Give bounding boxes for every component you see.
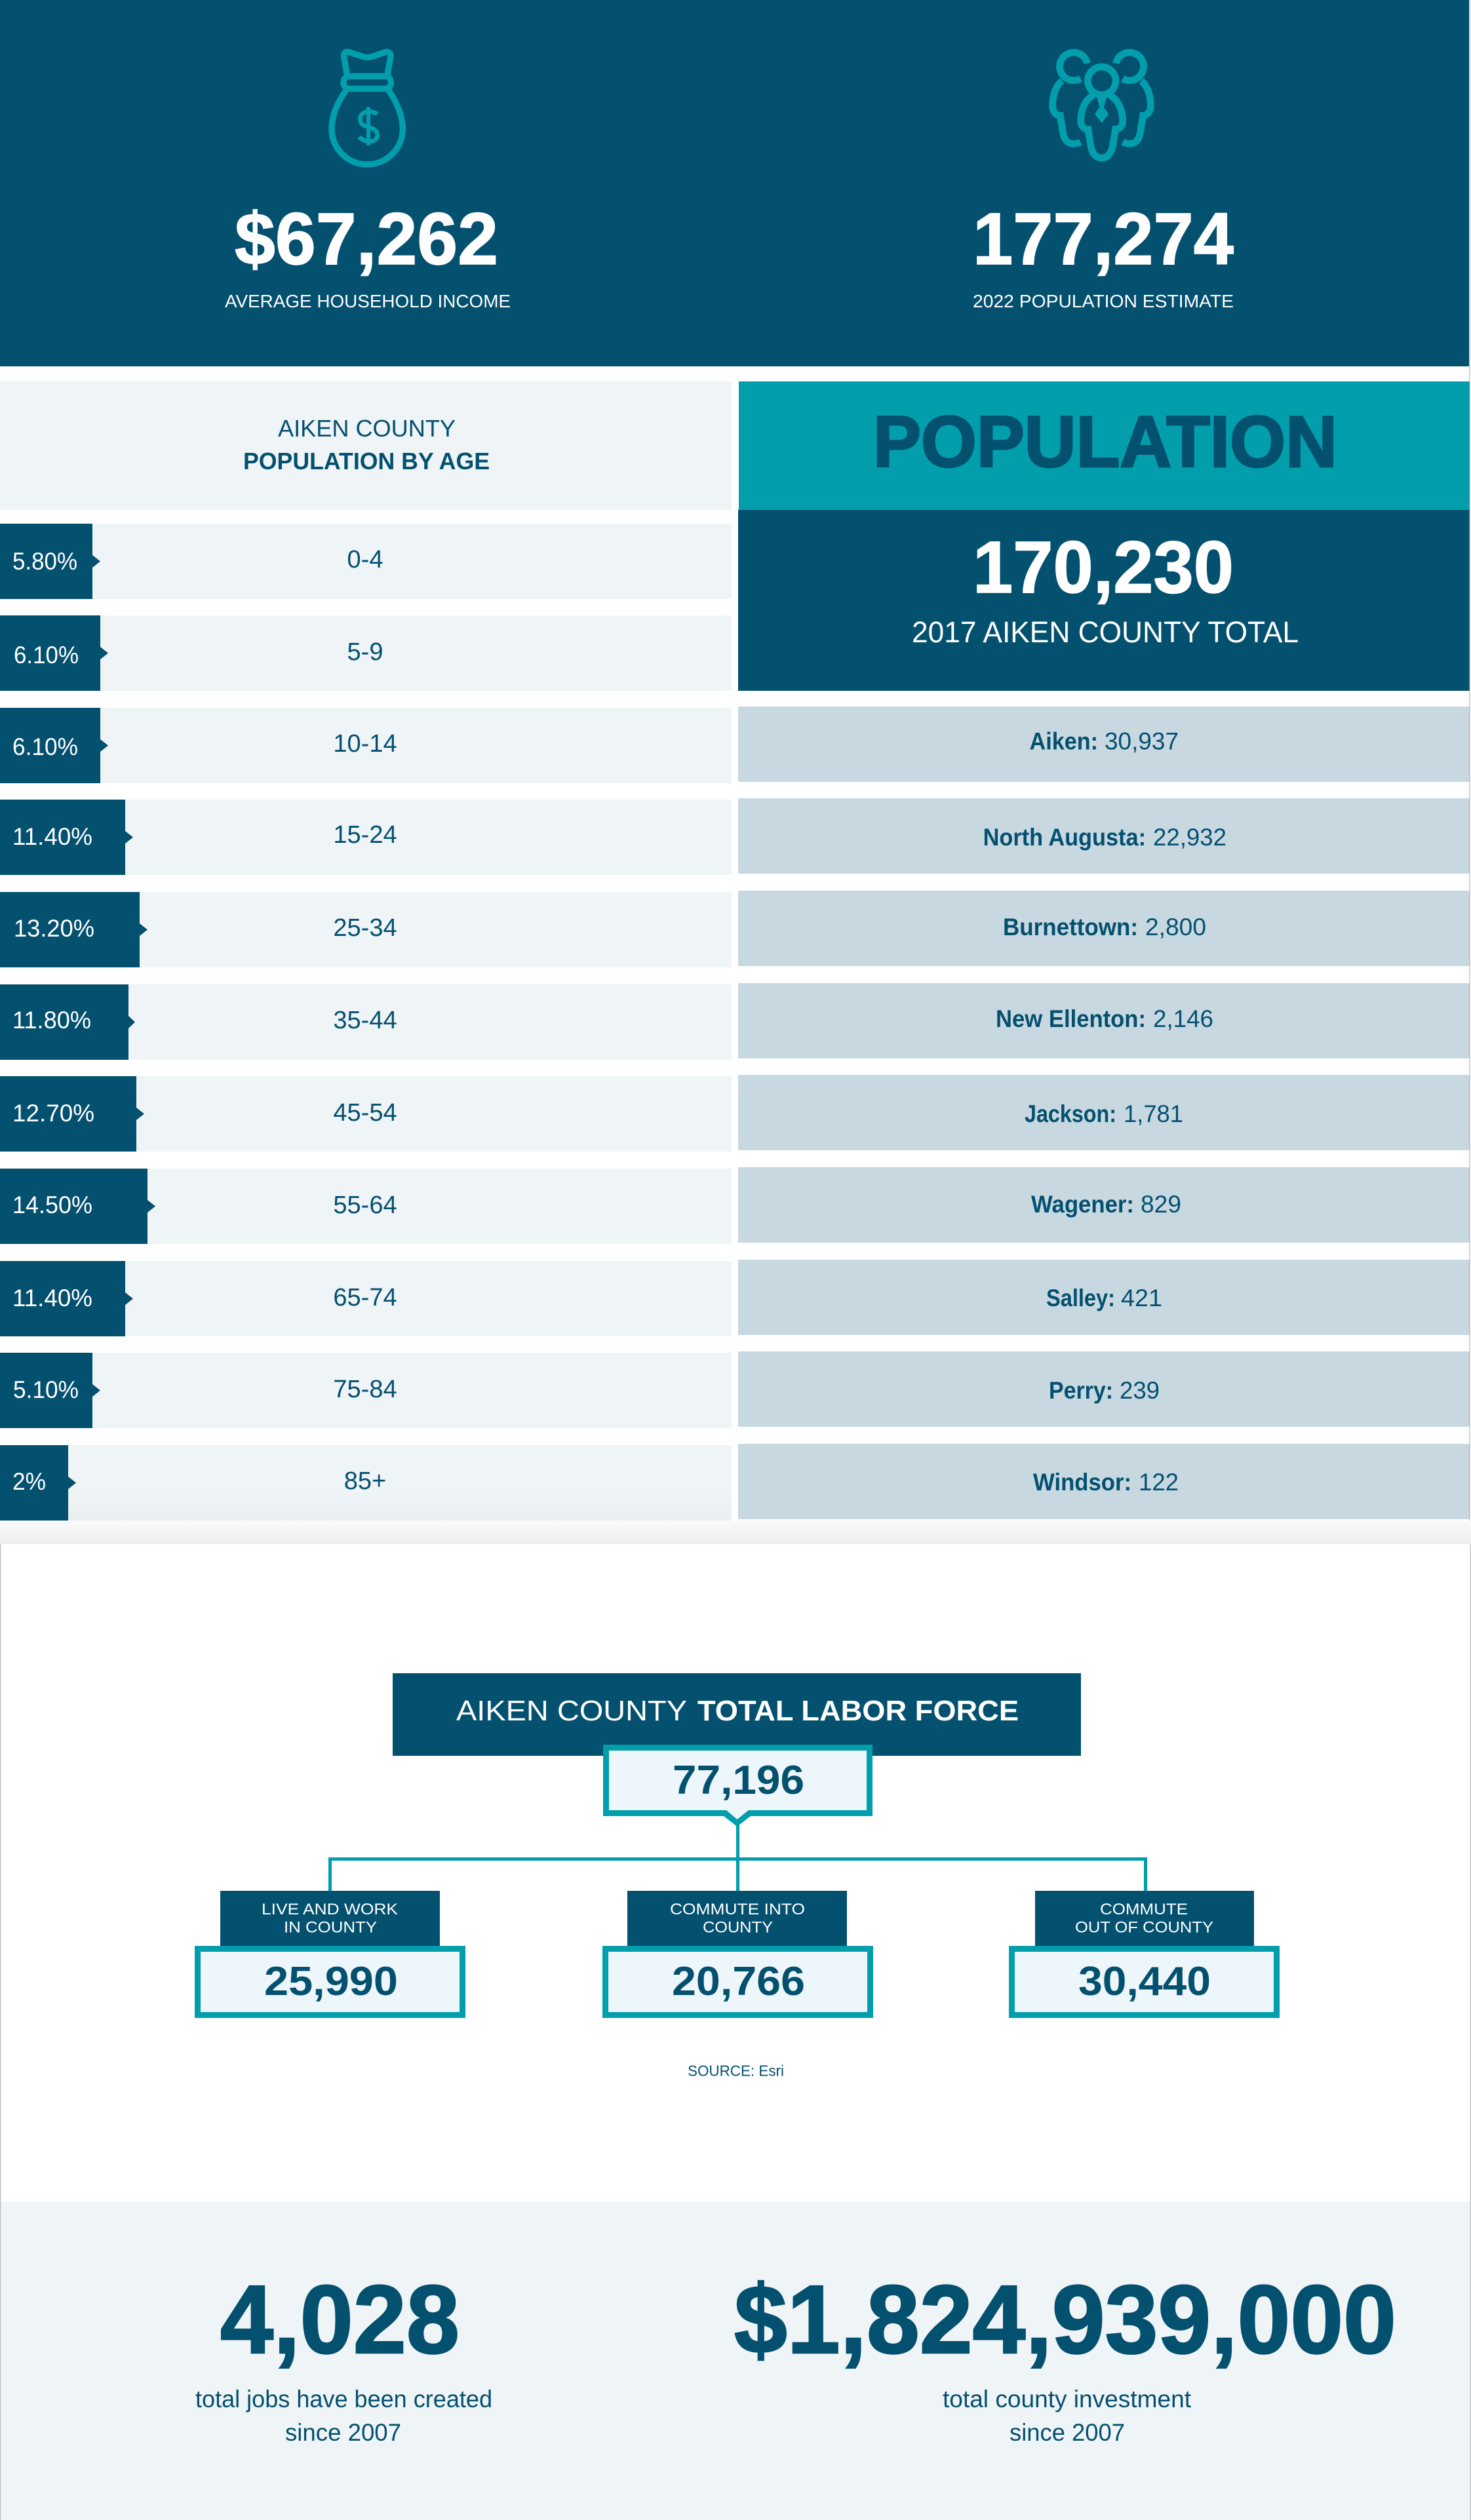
age row 15-24: 11.40% [12,823,92,850]
age row 5-9 [0,615,732,691]
county total label: 2017 AIKEN COUNTY TOTAL [912,615,1299,649]
county total value: 170,230 [973,526,1234,608]
city row Perry: 239 [1120,1377,1160,1404]
city row Salley: 421 [1121,1285,1162,1311]
city row Burnettown [738,891,1470,966]
age row 55-64 [0,1169,732,1244]
branch: commute out of county: COMMUTE [1100,1901,1188,1918]
city row Jackson: Jackson: [1025,1100,1116,1127]
age row 10-14: 6.10% [12,733,78,760]
city row Jackson [738,1075,1470,1150]
branch: live and work in county: 25,990 [264,1959,398,2004]
icon: money bag [332,52,402,165]
heading line: county: AIKEN COUNTY [278,415,456,442]
panel: population title [739,381,1470,510]
jobs stat: total jobs have been created [195,2386,492,2413]
heading line: population by age: POPULATION BY AGE [243,448,490,475]
age row 25-34: 25-34 [333,914,397,942]
city row Wagener: Wagener: [1031,1191,1134,1218]
city row Burnettown: 2,800 [1145,914,1206,940]
panel: total labor force diagram [198,1673,1277,2079]
city row Wagener [738,1167,1470,1243]
panel: population by city list [738,707,1470,1519]
age row 25-34 [0,892,732,967]
total value callout box: 77,196 [673,1758,804,1803]
city row New Ellenton [738,983,1470,1058]
total value callout box [603,1745,873,1827]
age row 85+ [0,1445,732,1521]
branch: commute out of county [1012,1891,1277,2015]
age row 0-4: 5.80% [12,548,77,575]
age row 5-9: 6.10% [14,642,79,669]
age row 45-54: 45-54 [333,1099,397,1127]
age row 85+: 85+ [344,1467,386,1495]
city row Jackson: 1,781 [1124,1100,1183,1127]
labor force heading [393,1673,1081,1756]
jobs stat: 4,028 [220,2266,460,2374]
branch: commute out of county: OUT OF COUNTY [1075,1919,1213,1936]
age row 35-44: 11.80% [12,1007,91,1034]
city row Salley: Salley: [1046,1285,1115,1311]
age row 5-9: 5-9 [347,638,383,666]
city row Aiken: 30,937 [1105,727,1179,755]
age row 75-84: 5.10% [13,1376,79,1403]
city row New Ellenton: 2,146 [1153,1005,1213,1032]
age row 55-64: 14.50% [12,1192,92,1218]
panel: population by age heading [0,381,732,510]
city row Perry [738,1351,1470,1427]
population estimate label: 2022 POPULATION ESTIMATE [973,291,1234,311]
city row Windsor: Windsor: [1033,1469,1131,1496]
source note: SOURCE: Esri [688,2062,784,2079]
income value: $67,262 [235,198,498,280]
jobs stat [195,2266,492,2446]
age row 45-54: 12.70% [12,1100,94,1127]
connector lines [328,1822,1147,1891]
age row 85+: 2% [12,1468,46,1495]
city row Salley [738,1260,1470,1335]
city row North Augusta [738,798,1470,874]
investment stat [734,2266,1396,2446]
age row 65-74: 11.40% [12,1285,92,1311]
panel: 2017 county total [738,510,1470,691]
labor force heading: AIKEN COUNTY [456,1695,687,1727]
age row 15-24: 15-24 [333,821,397,849]
jobs stat: since 2007 [285,2419,401,2446]
city row Perry: Perry: [1049,1377,1113,1404]
population estimate value: 177,274 [973,198,1234,280]
age row 35-44: 35-44 [333,1007,397,1034]
labor force heading: TOTAL LABOR FORCE [697,1695,1019,1727]
age row 75-84: 75-84 [333,1376,397,1403]
age row 65-74: 65-74 [333,1284,397,1311]
branch: live and work in county [198,1891,463,2015]
branch: live and work in county: LIVE AND WORK [262,1901,398,1918]
branch: commute into county [606,1891,871,2015]
age row 25-34: 13.20% [14,915,94,942]
age row 55-64: 55-64 [333,1192,397,1219]
city row Aiken [738,707,1470,782]
city row Burnettown: Burnettown: [1003,914,1138,940]
branch: commute into county: COMMUTE INTO [670,1901,805,1918]
age row 10-14 [0,708,732,783]
city row North Augusta: 22,932 [1153,824,1226,851]
branch: live and work in county: IN COUNTY [284,1919,377,1936]
city row Windsor: 122 [1139,1469,1179,1496]
panel: jobs and investment band [1,2201,1470,2520]
city row New Ellenton: New Ellenton: [996,1005,1146,1032]
age row 75-84 [0,1353,732,1428]
branch: commute out of county: 30,440 [1078,1959,1211,2004]
city row Windsor [738,1444,1470,1519]
age row 45-54 [0,1076,732,1152]
age row 0-4: 0-4 [347,546,383,573]
age row 0-4 [0,524,732,599]
age row 15-24 [0,800,732,875]
branch: commute into county: 20,766 [672,1959,805,2004]
income label: AVERAGE HOUSEHOLD INCOME [225,291,511,311]
age row 10-14: 10-14 [333,730,397,758]
city row Aiken: Aiken: [1029,727,1098,755]
panel: population by age bar chart [0,524,732,1521]
heading: population: POPULATION [873,402,1337,482]
city row North Augusta: North Augusta: [983,824,1146,851]
investment stat: $1,824,939,000 [734,2266,1396,2374]
city row Wagener: 829 [1141,1191,1181,1218]
age row 35-44 [0,984,732,1060]
investment stat: since 2007 [1010,2419,1125,2446]
panel: top statistics band [0,0,1469,366]
branch: commute into county: COUNTY [703,1919,773,1936]
icon: group of people [1053,52,1150,158]
age row 65-74 [0,1261,732,1336]
investment stat: total county investment [943,2386,1192,2413]
